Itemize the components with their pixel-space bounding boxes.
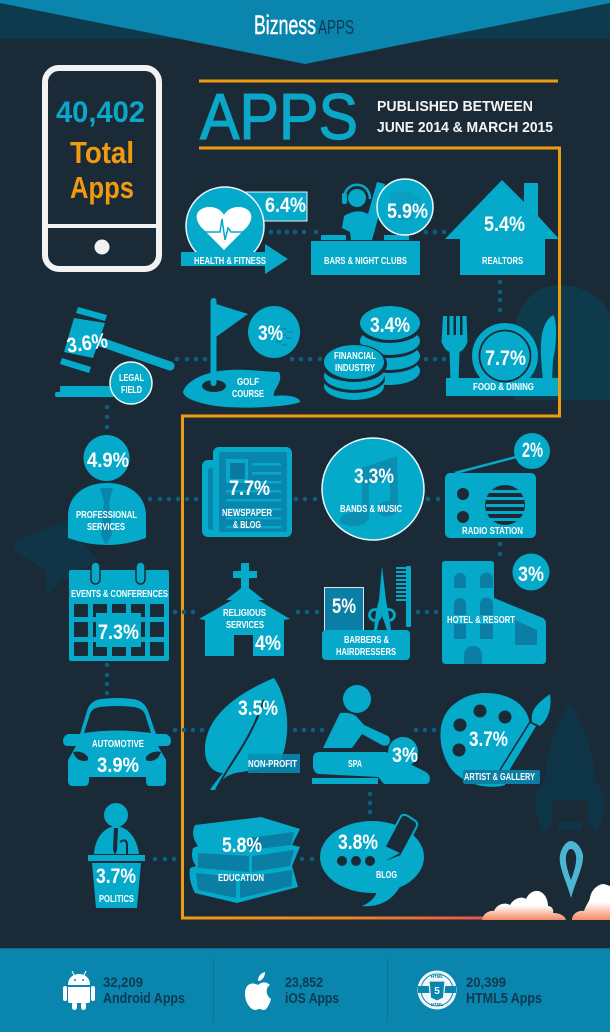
item: politics: POLITICS (99, 893, 134, 905)
item: religious services: RELIGIOUS (223, 607, 266, 619)
item: legal field: LEGAL (119, 372, 144, 384)
item: legal field (55, 307, 170, 404)
item: health and fitness (181, 187, 307, 274)
item: artist and gallery: 3.7% (469, 728, 508, 751)
item: automotive: 3.9% (97, 754, 139, 777)
item: education (190, 817, 300, 903)
item: bars and night clubs: BARS & NIGHT CLUBS (324, 255, 407, 267)
item: professional services: SERVICES (87, 521, 125, 533)
item: religious services (199, 563, 290, 656)
header band (0, 0, 610, 64)
item: non-profit (205, 678, 300, 790)
logo: Bizness (254, 10, 316, 40)
title: JUNE 2014 & MARCH 2015 (377, 120, 553, 136)
android count: Android Apps (103, 990, 185, 1007)
item: spa: SPA (348, 758, 362, 770)
item: non-profit: NON-PROFIT (248, 758, 297, 770)
item: radio station (445, 433, 550, 538)
icon: html5 badge: HTML (431, 974, 443, 979)
decorative: dome silhouette behind food (515, 285, 610, 400)
item: events and conferences: 7.3% (98, 621, 139, 644)
item: realtors: REALTORS (482, 255, 523, 267)
connector dots (105, 230, 502, 861)
icon: android (63, 971, 95, 1010)
item: health and fitness: 6.4% (265, 194, 306, 217)
item: newspaper and blog: 7.7% (229, 477, 270, 500)
item: artist and gallery (440, 693, 551, 787)
item: bands and music: 3.3% (354, 465, 394, 488)
logo: APPS (318, 17, 354, 39)
item: newspaper and blog: NEWSPAPER (222, 507, 272, 519)
item: blog (320, 815, 424, 906)
item: politics: 3.7% (96, 865, 136, 888)
item: financial industry (321, 306, 420, 400)
item: bands and music: BANDS & MUSIC (340, 503, 402, 515)
item: artist and gallery: ARTIST & GALLERY (464, 771, 535, 783)
item: realtors: 5.4% (484, 213, 525, 236)
phone: total apps (45, 68, 159, 269)
item: financial industry: 3.4% (370, 314, 410, 337)
title: APPS (200, 80, 358, 153)
item: events and conferences (69, 562, 169, 661)
item: legal field: FIELD (121, 384, 142, 396)
item: newspaper and blog (202, 447, 292, 537)
phone: total apps: Total (70, 135, 134, 170)
item: bars and night clubs (311, 179, 433, 275)
phone: total apps: 40,402 (56, 96, 145, 129)
item: golf course: 3% (258, 322, 283, 345)
icon: html5 badge: 5 (434, 986, 440, 997)
ios count: iOS Apps (285, 990, 339, 1007)
item: barbers and hairdressers (322, 566, 411, 660)
item: hotel and resort (442, 554, 550, 664)
orange frame lines (182, 81, 560, 918)
phone: total apps: Apps (70, 170, 134, 205)
ios count: 23,852 (285, 974, 323, 990)
item: legal field: 3.6% (65, 329, 109, 358)
item: blog: BLOG (376, 869, 397, 881)
icon: rocket flame pin (560, 841, 583, 898)
item: hotel and resort: 3% (518, 563, 544, 586)
item: bars and night clubs: 5.9% (387, 200, 428, 223)
item: religious services: 4% (255, 632, 281, 655)
item: food and dining: FOOD & DINING (473, 381, 534, 393)
item: blog: 3.8% (338, 831, 378, 854)
html5 count (466, 974, 542, 1007)
item: professional services (68, 435, 146, 545)
item: hotel and resort: HOTEL & RESORT (447, 614, 515, 626)
decorative: rocket silhouette left (12, 520, 97, 596)
item: professional services: PROFESSIONAL (76, 509, 137, 521)
item: golf course (183, 298, 300, 408)
item: newspaper and blog: & BLOG (233, 519, 261, 531)
item: education: 5.8% (222, 834, 262, 857)
item: food and dining: 7.7% (485, 347, 526, 370)
item: realtors (445, 180, 559, 275)
item: barbers and hairdressers: BARBERS & (344, 634, 389, 646)
item: barbers and hairdressers: HAIRDRESSERS (336, 646, 396, 658)
icon: html5 badge (418, 970, 456, 1010)
item: bands and music (322, 438, 424, 540)
item: automotive: AUTOMOTIVE (92, 738, 144, 750)
item: food and dining (442, 315, 558, 396)
item: non-profit: 3.5% (238, 697, 278, 720)
html5 count: HTML5 Apps (466, 990, 542, 1007)
item: barbers and hairdressers: 5% (332, 595, 356, 618)
icon: apple (245, 972, 271, 1010)
item: golf course: COURSE (232, 388, 264, 400)
item: events and conferences: EVENTS & CONFERENCES (71, 588, 168, 600)
item: radio station: 2% (522, 439, 543, 462)
title (200, 80, 553, 153)
icon: html5 badge: HTML (431, 1002, 443, 1007)
item: health and fitness: HEALTH & FITNESS (194, 255, 266, 267)
item: religious services: SERVICES (226, 619, 264, 631)
ios count (285, 974, 339, 1007)
item: education: EDUCATION (218, 872, 264, 884)
item: golf course: GOLF (237, 376, 259, 388)
title: PUBLISHED BETWEEN (377, 99, 533, 115)
item: spa: 3% (392, 744, 418, 767)
decorative: rocket silhouette right (535, 703, 605, 835)
footer band (0, 948, 610, 1032)
item: financial industry: FINANCIAL (334, 350, 376, 362)
android count (103, 974, 185, 1007)
item: professional services: 4.9% (87, 449, 129, 472)
item: radio station: RADIO STATION (462, 525, 523, 537)
icon: exhaust clouds (482, 884, 610, 920)
android count: 32,209 (103, 974, 143, 990)
item: spa (312, 685, 430, 784)
item: financial industry: INDUSTRY (335, 362, 375, 374)
item: automotive (63, 698, 171, 786)
html5 count: 20,399 (466, 974, 506, 990)
item: politics (88, 803, 145, 908)
